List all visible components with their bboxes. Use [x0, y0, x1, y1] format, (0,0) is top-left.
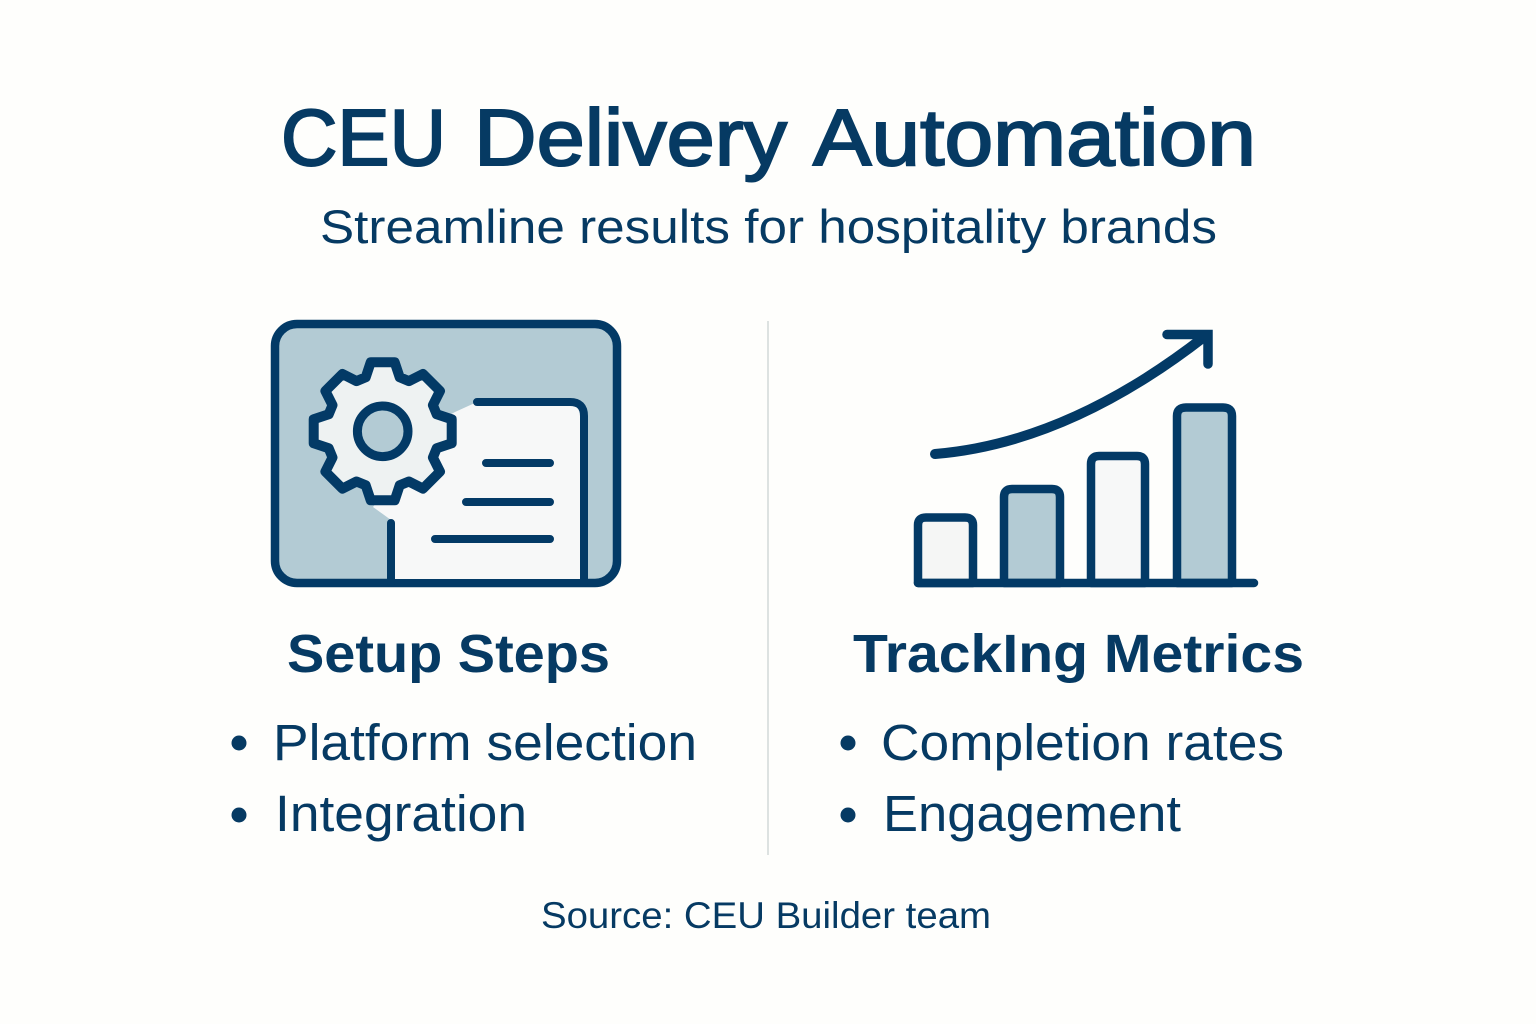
icon: rising bar chart with arrow	[918, 334, 1254, 583]
heading: setup steps: Setup Steps	[287, 624, 610, 684]
bullet list: tracking metrics: Completion rates	[881, 714, 1284, 771]
bullet list: tracking metrics: Engagement	[883, 785, 1181, 842]
panel: tracking metrics	[840, 334, 1304, 842]
bullet list: tracking metrics	[840, 714, 1284, 842]
icon: settings gear and document	[275, 324, 617, 583]
title	[281, 93, 1256, 182]
title: Automation	[813, 93, 1256, 182]
subtitle: Streamline results for hospitality brands	[320, 200, 1217, 253]
bullet list: setup steps: Platform selection	[273, 714, 697, 771]
title: Delivery	[474, 93, 787, 182]
bar 4	[1177, 408, 1232, 583]
heading: tracking metrics: TrackIng Metrics	[853, 624, 1304, 684]
gear	[314, 362, 452, 500]
bar 2	[1004, 489, 1060, 583]
trend arrow	[935, 334, 1208, 454]
title: CEU	[281, 93, 446, 182]
baseline	[918, 579, 1254, 587]
icon frame	[275, 324, 617, 583]
document sheet	[373, 402, 584, 583]
panel: setup steps	[232, 324, 697, 842]
bar 1	[918, 518, 973, 583]
bullet list: setup steps	[232, 714, 697, 842]
source note: Source: CEU Builder team	[541, 895, 991, 936]
bar 3	[1091, 456, 1145, 583]
bullet list: setup steps: Integration	[275, 785, 527, 842]
